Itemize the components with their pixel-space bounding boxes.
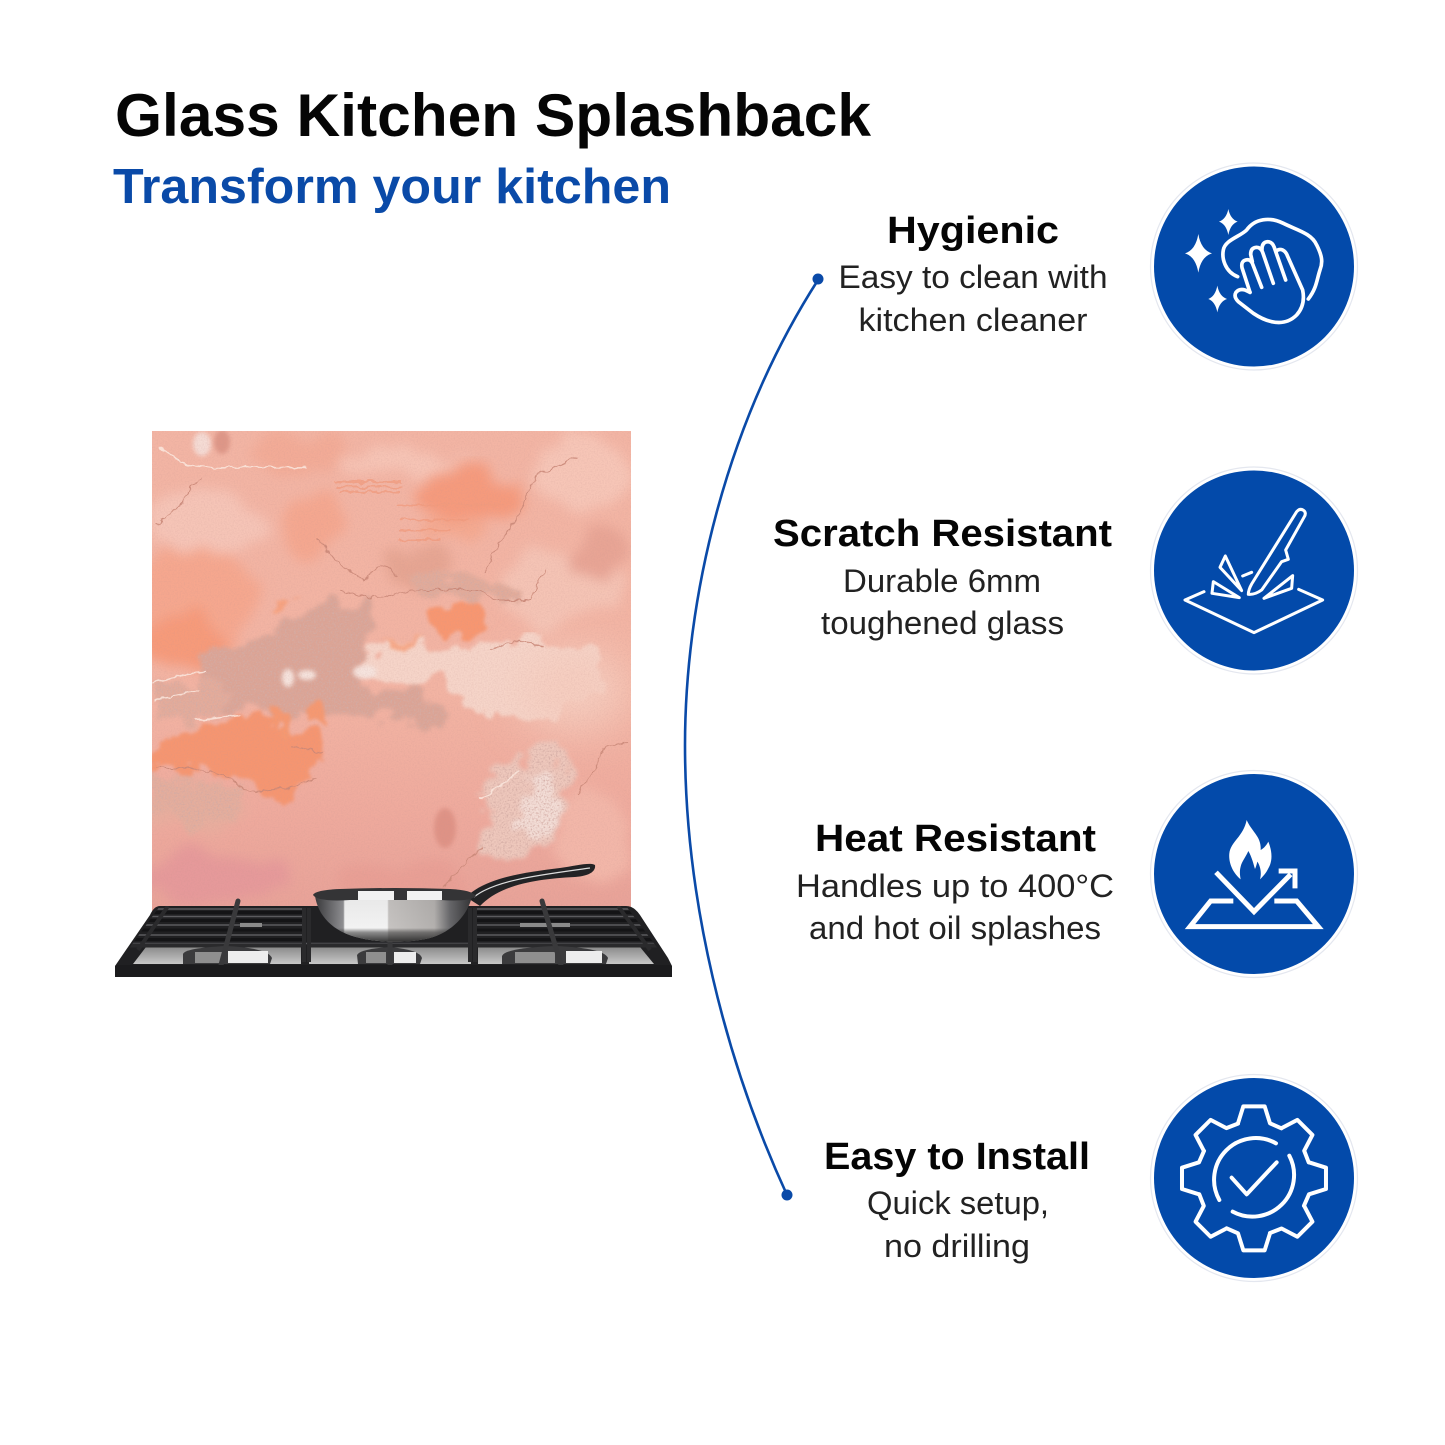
feature text: hygienic: kitchen cleaner (858, 302, 1088, 338)
burners (183, 923, 608, 964)
feature text: easy to install (824, 1136, 1090, 1264)
pan rim (313, 888, 476, 900)
feature text: heat resistant: Heat Resistant (815, 818, 1096, 860)
feature text: hygienic (838, 210, 1108, 338)
feature text: heat resistant: and hot oil splashes (809, 910, 1101, 946)
feature text: scratch resistant: toughened glass (821, 605, 1064, 641)
subtitle: Transform your kitchen (113, 160, 671, 214)
pan body (315, 896, 472, 942)
feature text: scratch resistant (773, 513, 1112, 641)
hob grate bars (130, 906, 660, 966)
feature text: easy to install: no drilling (884, 1228, 1030, 1264)
orange patches (152, 595, 488, 808)
title: Glass Kitchen Splashback (115, 82, 872, 149)
feature text: scratch resistant: Scratch Resistant (773, 513, 1112, 555)
feature text: easy to install: Quick setup, (867, 1185, 1049, 1221)
feature text: easy to install: Easy to Install (824, 1136, 1090, 1178)
orange brushed areas (403, 471, 527, 544)
feature text: heat resistant: Handles up to 400°C (796, 868, 1114, 904)
hob front strip (115, 965, 672, 977)
feature text: heat resistant (796, 818, 1114, 946)
hob steel trays (133, 947, 301, 964)
mottled band (152, 575, 525, 825)
icon: easy install gear with check (1150, 1074, 1358, 1282)
product image: splashback and hob (115, 430, 672, 977)
hob cross bars (221, 901, 561, 965)
white spot top left (193, 432, 211, 456)
feature text: hygienic: Hygienic (887, 210, 1059, 252)
frying pan (313, 864, 595, 942)
pan handle (466, 864, 595, 906)
icon: scratch resistant knife on glass (1150, 467, 1358, 674)
icon: hygienic hand wiping with sparkles (1150, 163, 1358, 370)
connector start dot (812, 274, 824, 284)
lower right plaster (478, 745, 575, 860)
feature text: hygienic: Easy to clean with (838, 259, 1108, 295)
connector curve (685, 274, 824, 1200)
grain (152, 431, 631, 911)
light cream patch (362, 640, 600, 720)
connector end dot (782, 1190, 792, 1200)
splashback marble panel (120, 430, 635, 911)
cracks (153, 448, 627, 888)
icon: heat resistant flame (1150, 770, 1358, 978)
hob (115, 901, 672, 977)
feature text: scratch resistant: Durable 6mm (843, 563, 1041, 599)
hob base (115, 906, 672, 977)
